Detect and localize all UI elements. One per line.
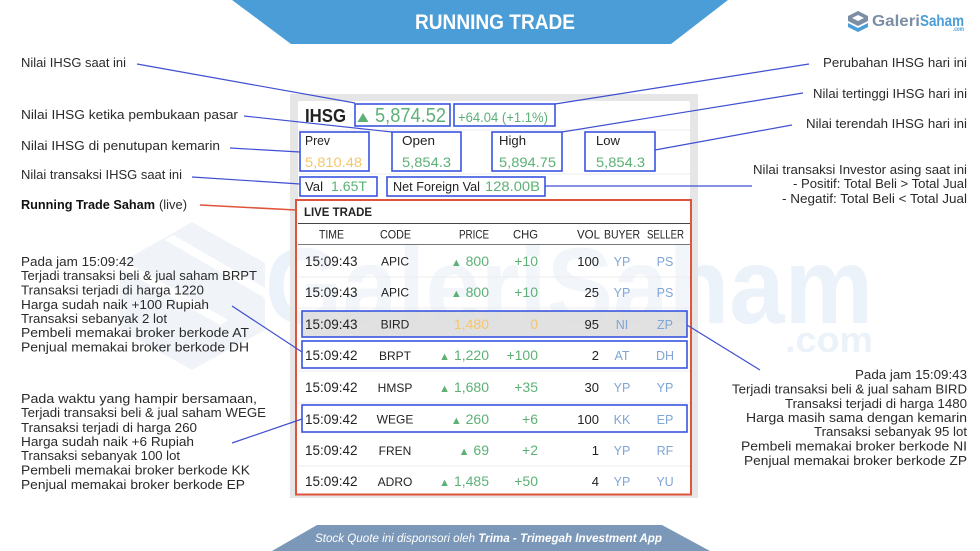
header banner: RUNNING TRADE: [415, 11, 575, 34]
table column headers: VOL: [577, 230, 601, 242]
Net Foreign Val box: Net Foreign Val: [393, 179, 480, 194]
footer banner: [272, 525, 710, 551]
Val box: [300, 177, 377, 196]
left annotations: index labels: Nilai IHSG di penutupan kemarin: [21, 138, 220, 153]
row: APIC 100: 100: [577, 254, 599, 269]
IHSG daily change: [454, 104, 555, 126]
row: FREN: 15:09:42: [305, 443, 358, 458]
Open box: 5,854.3: [402, 154, 451, 170]
row: APIC 25: ▲ 800: [451, 284, 489, 300]
row: ADRO: 15:09:42: [305, 474, 358, 489]
row: FREN: ▲ 69: [459, 442, 489, 458]
row: ADRO: ADRO: [378, 475, 412, 489]
row: APIC 100: APIC: [381, 254, 409, 268]
logo: GaleriSaham: Saham: [920, 13, 964, 30]
row: APIC 100: 15:09:43: [305, 254, 358, 269]
High box: [492, 132, 562, 171]
text block: WEGE explanation: Pembeli memakai broker berkode KK: [21, 462, 250, 478]
text block: foreign value explanation: - Negatif: Total Beli < Total Jual: [782, 191, 967, 206]
row: HMSP: ▲ 1,680: [439, 379, 489, 395]
text block: BIRD explanation: Harga masih sama dengan kemarin: [746, 410, 967, 425]
logo: GaleriSaham: Galeri: [872, 13, 920, 30]
row: FREN: RF: [657, 444, 674, 458]
row: BRPT: ▲ 1,220: [439, 347, 489, 363]
label: Running Trade Saham: Running Trade Saham: [21, 197, 155, 212]
table column headers: PRICE: [459, 230, 489, 242]
left annotations: index labels: Nilai transaksi IHSG saat ini: [21, 167, 182, 182]
row: APIC 100: PS: [657, 255, 673, 269]
live trade title: LIVE TRADE: [304, 207, 372, 219]
Open box: [392, 132, 461, 171]
IHSG index value: IHSG: [305, 106, 346, 126]
row: BIRD: 0: [530, 316, 538, 332]
Val box: Val: [305, 179, 323, 194]
Prev box: Prev: [305, 133, 330, 148]
text block: BRPT explanation: Transaksi sebanyak 2 lot: [21, 311, 167, 326]
row: APIC 25: 15:09:43: [305, 285, 358, 300]
row: BRPT: DH: [656, 349, 674, 363]
row: APIC 100: +10: [514, 253, 538, 269]
row: WEGE: WEGE: [377, 412, 413, 426]
table column headers: [319, 230, 684, 242]
row: WEGE: 100: [577, 412, 599, 427]
row: BRPT: 15:09:42: [305, 348, 358, 363]
text block: WEGE explanation: Terjadi transaksi beli & jual saham WEGE: [21, 405, 266, 420]
Low box: 5,854.3: [596, 154, 645, 170]
Net Foreign Val box: 128.00B: [485, 178, 540, 194]
row: APIC 25: APIC: [381, 286, 409, 300]
row: FREN: 1: [592, 443, 599, 458]
text block: WEGE explanation: [21, 391, 266, 492]
row: WEGE: [305, 411, 673, 427]
right annotations: index labels: [806, 55, 967, 131]
row: FREN: FREN: [379, 444, 411, 458]
watermark: GaleriSaham: GaleriSaham: [265, 225, 873, 346]
Open box: Open: [402, 133, 435, 148]
text block: BRPT explanation: Terjadi transaksi beli & jual saham BRPT: [21, 268, 257, 283]
row: BIRD: 15:09:43: [305, 317, 358, 332]
row: BIRD: [305, 316, 673, 332]
header banner: [232, 0, 728, 44]
row: WEGE: KK: [614, 413, 631, 427]
row: FREN: +2: [522, 442, 538, 458]
row: ADRO: YU: [656, 475, 674, 489]
text block: BIRD explanation: Pada jam 15:09:43: [855, 367, 967, 382]
text block: WEGE explanation: Transaksi sebanyak 100 lot: [21, 448, 180, 463]
row: HMSP: HMSP: [378, 381, 412, 395]
row: APIC 25: [305, 284, 673, 300]
row: BIRD: BIRD: [381, 318, 410, 332]
row: BIRD: ZP: [657, 318, 673, 332]
row: APIC 25: 25: [585, 285, 599, 300]
text block: BRPT explanation: Harga sudah naik +100 Rupiah: [21, 297, 209, 312]
text block: BRPT explanation: Pada jam 15:09:42: [21, 254, 134, 269]
watermark: GaleriSaham: .com: [785, 319, 873, 360]
highlight: WEGE row: [302, 405, 687, 432]
text block: BIRD explanation: [732, 367, 967, 468]
High box: High: [499, 133, 526, 148]
text block: WEGE explanation: Transaksi terjadi di harga 260: [21, 420, 197, 435]
table column headers: CHG: [513, 230, 538, 242]
highlight: BIRD row: [302, 311, 687, 337]
logo: GaleriSaham: [848, 11, 964, 33]
logo: GaleriSaham: .com: [953, 27, 964, 33]
watermark: GaleriSaham: [120, 222, 873, 370]
row: ADRO: YP: [614, 475, 630, 489]
row: BRPT: 2: [592, 348, 599, 363]
right annotations: index labels: Nilai tertinggi IHSG hari ini: [813, 86, 967, 101]
row: WEGE: 15:09:42: [305, 412, 358, 427]
row: ADRO: 4: [592, 474, 599, 489]
row: BRPT: BRPT: [379, 349, 412, 363]
left annotations: index labels: [21, 55, 239, 182]
Val box: 1.65T: [331, 178, 367, 194]
right annotations: index labels: Nilai terendah IHSG hari ini: [806, 116, 967, 131]
text block: BIRD explanation: Terjadi transaksi beli & jual saham BIRD: [732, 382, 967, 396]
text block: BRPT explanation: Transaksi terjadi di harga 1220: [21, 282, 204, 298]
text block: BRPT explanation: Penjual memakai broker berkode DH: [21, 340, 249, 354]
High box: 5,894.75: [499, 154, 556, 170]
text block: foreign value explanation: - Positif: Total Beli > Total Jual: [793, 176, 967, 191]
footer banner: Stock Quote ini disponsori oleh Trima - Trimegah Investment App: [315, 531, 662, 545]
row: BRPT: AT: [614, 349, 630, 363]
text block: foreign value explanation: Nilai transaksi Investor asing saat ini: [753, 162, 967, 177]
panel: stock quote screen: [290, 94, 698, 498]
row: BIRD: 1,480: [454, 316, 489, 332]
text block: BIRD explanation: Transaksi terjadi di harga 1480: [785, 396, 967, 411]
row: HMSP: 15:09:42: [305, 380, 358, 395]
Prev box: [300, 132, 369, 171]
text block: WEGE explanation: Pada waktu yang hampir bersamaan,: [21, 391, 257, 406]
left annotations: index labels: Nilai IHSG ketika pembukaan pasar: [21, 107, 239, 122]
highlight: BRPT row: [302, 341, 687, 368]
row: APIC 100: [305, 253, 673, 269]
row: HMSP: YP: [657, 381, 673, 395]
text block: BRPT explanation: [21, 254, 257, 354]
table column headers: SELLER: [647, 230, 684, 242]
text block: BIRD explanation: Transaksi sebanyak 95 lot: [814, 424, 967, 439]
text block: foreign value explanation: [753, 162, 967, 206]
Prev box: 5,810.48: [305, 154, 362, 170]
row: APIC 25: YP: [614, 286, 630, 300]
text block: WEGE explanation: Harga sudah naik +6 Rupiah: [21, 434, 194, 449]
row: FREN: [305, 442, 674, 458]
row: BIRD: NI: [616, 318, 628, 332]
right annotations: index labels: Perubahan IHSG hari ini: [823, 55, 967, 70]
row: ADRO: [305, 473, 674, 489]
row: WEGE: ▲ 260: [451, 411, 489, 427]
row: HMSP: 30: [585, 380, 599, 395]
Net Foreign Val box: [387, 177, 545, 196]
row: APIC 100: ▲ 800: [451, 253, 489, 269]
text block: BIRD explanation: Penjual memakai broker berkode ZP: [744, 453, 967, 468]
label: Running Trade Saham: (live): [159, 197, 187, 212]
row: HMSP: [305, 379, 673, 395]
row: APIC 100: YP: [614, 255, 630, 269]
row: ADRO: ▲ 1,485: [439, 473, 489, 489]
Low box: [585, 132, 655, 171]
row: HMSP: YP: [614, 381, 630, 395]
row: APIC 25: PS: [657, 286, 673, 300]
IHSG index value: [305, 104, 450, 127]
row: APIC 25: +10: [514, 284, 538, 300]
leader lines: [137, 64, 809, 443]
table column headers: TIME: [319, 230, 344, 242]
row: BRPT: +100: [506, 347, 538, 363]
row: BIRD: 95: [585, 317, 599, 332]
row: WEGE: EP: [657, 413, 673, 427]
text block: WEGE explanation: Penjual memakai broker berkode EP: [21, 477, 245, 492]
IHSG daily change: +64.04 (+1.1%): [458, 109, 548, 125]
IHSG index value: 5,874.52: [375, 105, 446, 127]
left annotations: index labels: Nilai IHSG saat ini: [21, 55, 126, 70]
Low box: Low: [596, 133, 621, 148]
text block: BRPT explanation: Pembeli memakai broker berkode AT: [21, 325, 249, 340]
row: HMSP: +35: [514, 379, 538, 395]
row: FREN: YP: [614, 444, 630, 458]
table column headers: BUYER: [604, 230, 640, 242]
text block: BIRD explanation: Pembeli memakai broker berkode NI: [741, 438, 967, 454]
row: ADRO: +50: [514, 473, 538, 489]
row: BRPT: [305, 347, 674, 363]
row: WEGE: +6: [522, 411, 538, 427]
live trade table: [296, 200, 691, 494]
table column headers: CODE: [380, 230, 411, 242]
